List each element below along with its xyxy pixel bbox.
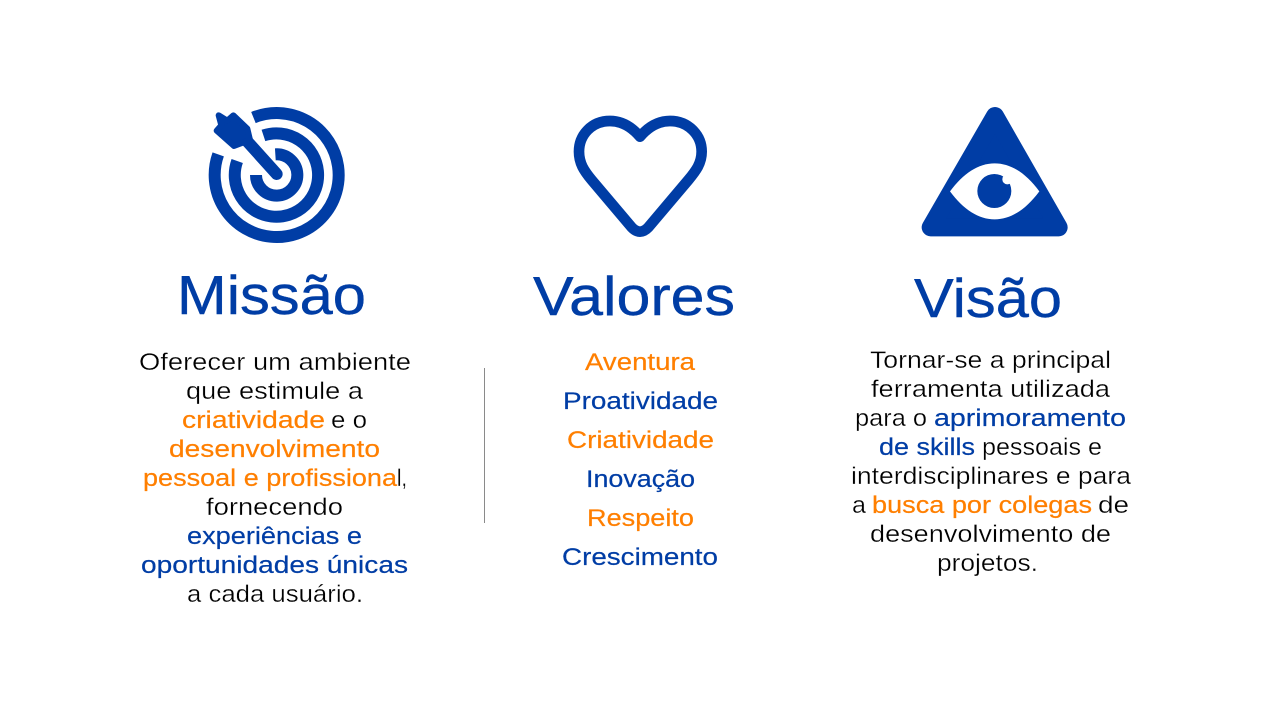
text block: missão description: a cada usuário. — [187, 581, 363, 608]
text block: visão description: para o — [855, 405, 927, 432]
text block: missão description: que estimule a — [186, 378, 364, 405]
heading: Missão: Missão — [177, 264, 366, 326]
icon: heart — [579, 121, 702, 232]
text block: missão description: pessoal e profissiona — [143, 465, 398, 492]
text block: missão description: l, — [397, 465, 407, 492]
text block: visão description: busca por colegas — [872, 492, 1092, 519]
icon: eye in triangle — [931, 116, 1059, 227]
text block: visão description: Tornar-se a principal — [870, 347, 1111, 374]
text block: visão description: desenvolvimento de — [870, 521, 1111, 548]
list: valores: Proatividade — [563, 388, 718, 415]
list: valores — [562, 349, 718, 571]
text block: visão description: a — [852, 492, 867, 519]
panel: Visão — [851, 116, 1132, 577]
text block: missão description: Oferecer um ambiente — [139, 349, 411, 376]
heading: Valores: Valores — [533, 265, 735, 327]
text block: missão description: desenvolvimento — [169, 436, 380, 463]
list: valores: Respeito — [587, 505, 694, 532]
text block: missão description: fornecendo — [206, 494, 343, 521]
panel: Valores — [533, 121, 735, 571]
text block: visão description: aprimoramento — [934, 405, 1126, 432]
list: valores: Inovação — [586, 466, 695, 493]
text block: visão description: pessoais e — [982, 434, 1102, 461]
text block: missão description: oportunidades únicas — [141, 552, 408, 579]
text block: missão description — [139, 349, 411, 608]
list: valores: Criatividade — [567, 427, 714, 454]
heading: Visão: Visão — [914, 267, 1062, 329]
list: valores: Aventura — [585, 349, 696, 376]
list: valores: Crescimento — [562, 544, 718, 571]
text block: missão description: experiências e — [187, 523, 362, 550]
icon: target with arrow — [215, 113, 339, 237]
text block: visão description: de — [1098, 492, 1129, 519]
text block: visão description: ferramenta utilizada — [871, 376, 1111, 403]
text block: visão description — [851, 347, 1132, 577]
panel: Missão — [139, 113, 411, 608]
text block: missão description: e o — [331, 407, 367, 434]
text block: visão description: interdisciplinares e para — [851, 463, 1132, 490]
text block: visão description: de skills — [879, 434, 975, 461]
text block: visão description: projetos. — [937, 550, 1038, 577]
text block: missão description: criatividade — [182, 407, 325, 434]
